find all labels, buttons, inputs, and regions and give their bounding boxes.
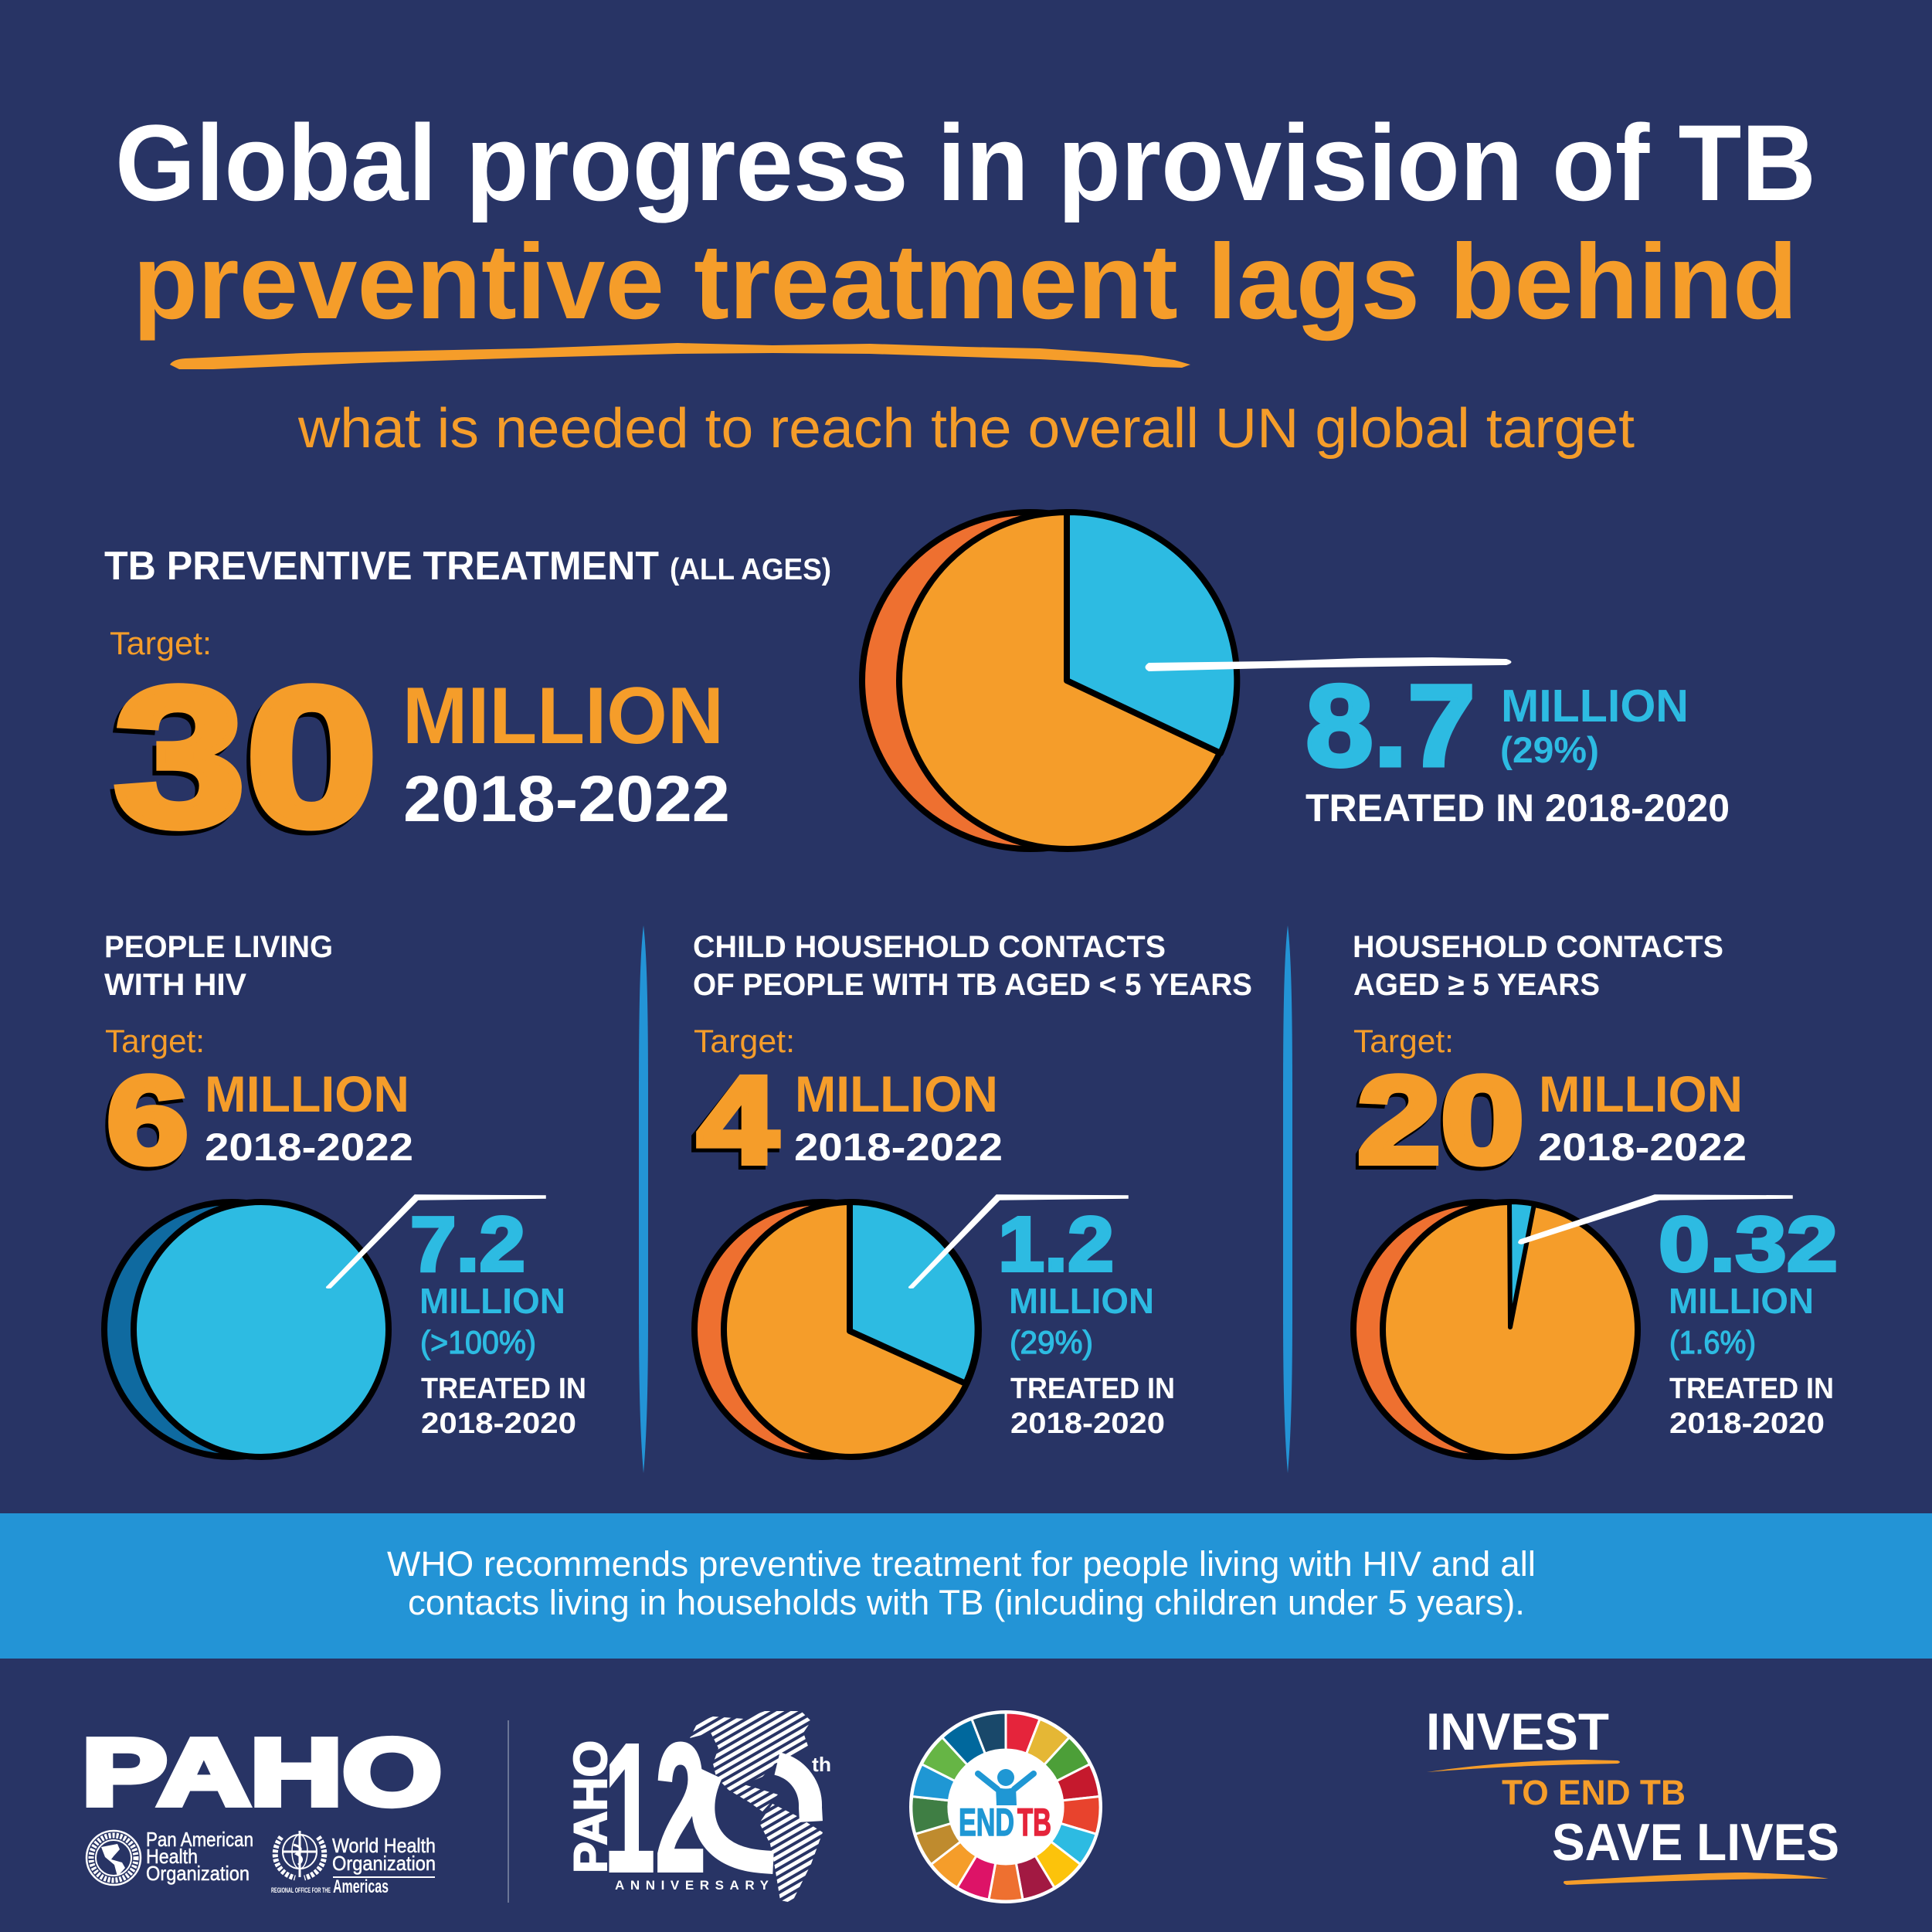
recommendation band: [0, 1513, 1932, 1659]
panel: child household contacts: [693, 930, 1252, 1457]
big number 4: 4: [698, 1051, 778, 1189]
leader line: [909, 1195, 1128, 1288]
logo: End TB wheel: TB: [1017, 1801, 1051, 1844]
big number 20: 20: [1357, 1051, 1524, 1189]
heading: [1353, 930, 1723, 1002]
logo: PAHO 120th anniversary: ANNIVERSARY: [615, 1878, 769, 1893]
logo: PAHO 120th anniversary: PAHO: [565, 1740, 616, 1873]
result: TREATED IN: [1669, 1373, 1834, 1405]
logo text: Pan American Health Organization: Health: [146, 1845, 198, 1868]
million label: MILLION: [1539, 1065, 1743, 1122]
heading: WITH HIV: [104, 968, 246, 1002]
title: Global progress in provision of TB: [115, 102, 1816, 223]
big number 30: 30: [114, 647, 378, 868]
result: [1659, 1201, 1838, 1440]
panel: people living with HIV: [104, 930, 586, 1457]
pie chart: over 100%: [104, 1202, 389, 1457]
target label: Target:: [694, 1023, 795, 1059]
result: 1.2: [998, 1201, 1114, 1288]
panel heading: TB PREVENTIVE TREATMENT: [104, 544, 659, 589]
logo text: World Health Organization Americas: [271, 1834, 436, 1897]
big number 4: 4: [693, 1054, 776, 1193]
slogan: invest to end TB save lives: [1426, 1703, 1839, 1885]
title underline brush stroke: [170, 343, 1190, 369]
result: TREATED IN: [1010, 1373, 1175, 1405]
leader line: all ages: [1145, 657, 1511, 671]
million label: MILLION: [402, 671, 724, 761]
result: [998, 1201, 1175, 1440]
heading: [693, 930, 1252, 1002]
logo: PAHO 120th anniversary: th: [812, 1753, 831, 1776]
title: [115, 102, 1816, 341]
pie chart: all ages 29%: [862, 512, 1237, 849]
million label: MILLION: [205, 1065, 409, 1122]
logo: PAHO 120th anniversary: 12: [604, 1706, 706, 1910]
result: 0.32: [1659, 1201, 1838, 1288]
panel: household contacts aged 5 and over: [1353, 930, 1838, 1457]
logo text: World Health Organization Americas: Americas: [333, 1876, 389, 1897]
logo text: Pan American Health Organization: Pan American: [146, 1828, 253, 1851]
slogan: invest to end TB save lives: TO END TB: [1502, 1773, 1686, 1812]
heading: [104, 930, 333, 1002]
target years: 2018-2022: [1538, 1126, 1747, 1169]
panel: all ages target: [104, 544, 831, 872]
target label: Target:: [1353, 1023, 1454, 1059]
result: (>100%): [420, 1324, 536, 1360]
logo text: World Health Organization Americas: Organization: [332, 1852, 436, 1875]
result: 2018-2020: [1010, 1407, 1165, 1440]
result: all ages: 8.7: [1306, 660, 1475, 790]
big number 6: 6: [104, 1054, 187, 1193]
subtitle: what is needed to reach the overall UN global target: [297, 398, 1635, 460]
pie chart: 1.6%: [1353, 1202, 1638, 1457]
logo text: Pan American Health Organization: [146, 1828, 253, 1885]
result: 2018-2020: [421, 1407, 576, 1440]
million label: MILLION: [795, 1065, 998, 1122]
result: MILLION: [1009, 1281, 1154, 1321]
target years: 2018-2022: [205, 1126, 413, 1169]
logo: End TB wheel: END: [959, 1801, 1014, 1844]
result: all ages: TREATED IN 2018-2020: [1306, 786, 1730, 830]
logo text: Pan American Health Organization: Organization: [146, 1862, 250, 1885]
target years: 2018-2022: [794, 1126, 1003, 1169]
recommendation band: contacts living in households with TB (inlcuding children under 5 years).: [408, 1583, 1525, 1622]
target years: 2018-2022: [403, 762, 730, 835]
logo text: World Health Organization Americas: World Health: [332, 1834, 436, 1857]
heading: CHILD HOUSEHOLD CONTACTS: [693, 930, 1166, 964]
pie chart: 29%: [694, 1202, 979, 1457]
result: 7.2: [410, 1201, 525, 1288]
result: MILLION: [419, 1281, 565, 1321]
heading: PEOPLE LIVING: [104, 930, 333, 964]
leader line: [327, 1195, 545, 1288]
panel heading: (ALL AGES): [670, 553, 831, 586]
heading: AGED ≥ 5 YEARS: [1353, 968, 1600, 1002]
result: all ages: (29%): [1500, 729, 1599, 770]
slogan: invest to end TB save lives: INVEST: [1426, 1703, 1609, 1761]
logo: WHO emblem: [275, 1831, 324, 1878]
slogan: invest to end TB save lives: SAVE LIVES: [1552, 1813, 1839, 1872]
logo text: World Health Organization Americas: REGIONAL OFFICE FOR THE: [271, 1886, 331, 1894]
title: preventive treatment lags behind: [133, 222, 1798, 341]
result: (29%): [1010, 1324, 1093, 1360]
target label: Target:: [105, 1023, 205, 1059]
big number 6: 6: [107, 1051, 188, 1189]
result: all ages: [1306, 660, 1730, 830]
result: all ages: MILLION: [1501, 681, 1689, 732]
result: TREATED IN: [421, 1373, 586, 1405]
recommendation band: WHO recommends preventive treatment for people living with HIV and all: [387, 1544, 1536, 1584]
leader line: [1519, 1195, 1792, 1244]
result: 2018-2020: [1669, 1407, 1825, 1440]
heading: OF PEOPLE WITH TB AGED < 5 YEARS: [693, 968, 1252, 1002]
result: MILLION: [1669, 1281, 1814, 1321]
result: [410, 1201, 586, 1440]
logo: Pan American Health Organization seal: [87, 1831, 141, 1885]
logo: End TB wheel: [909, 1710, 1102, 1903]
big number 20: 20: [1354, 1054, 1523, 1193]
heading: HOUSEHOLD CONTACTS: [1353, 930, 1723, 964]
result: (1.6%): [1669, 1324, 1756, 1360]
logo: PAHO wordmark: PAHO: [82, 1720, 442, 1825]
big number 30: 30: [110, 651, 374, 872]
target label: Target:: [110, 625, 212, 661]
